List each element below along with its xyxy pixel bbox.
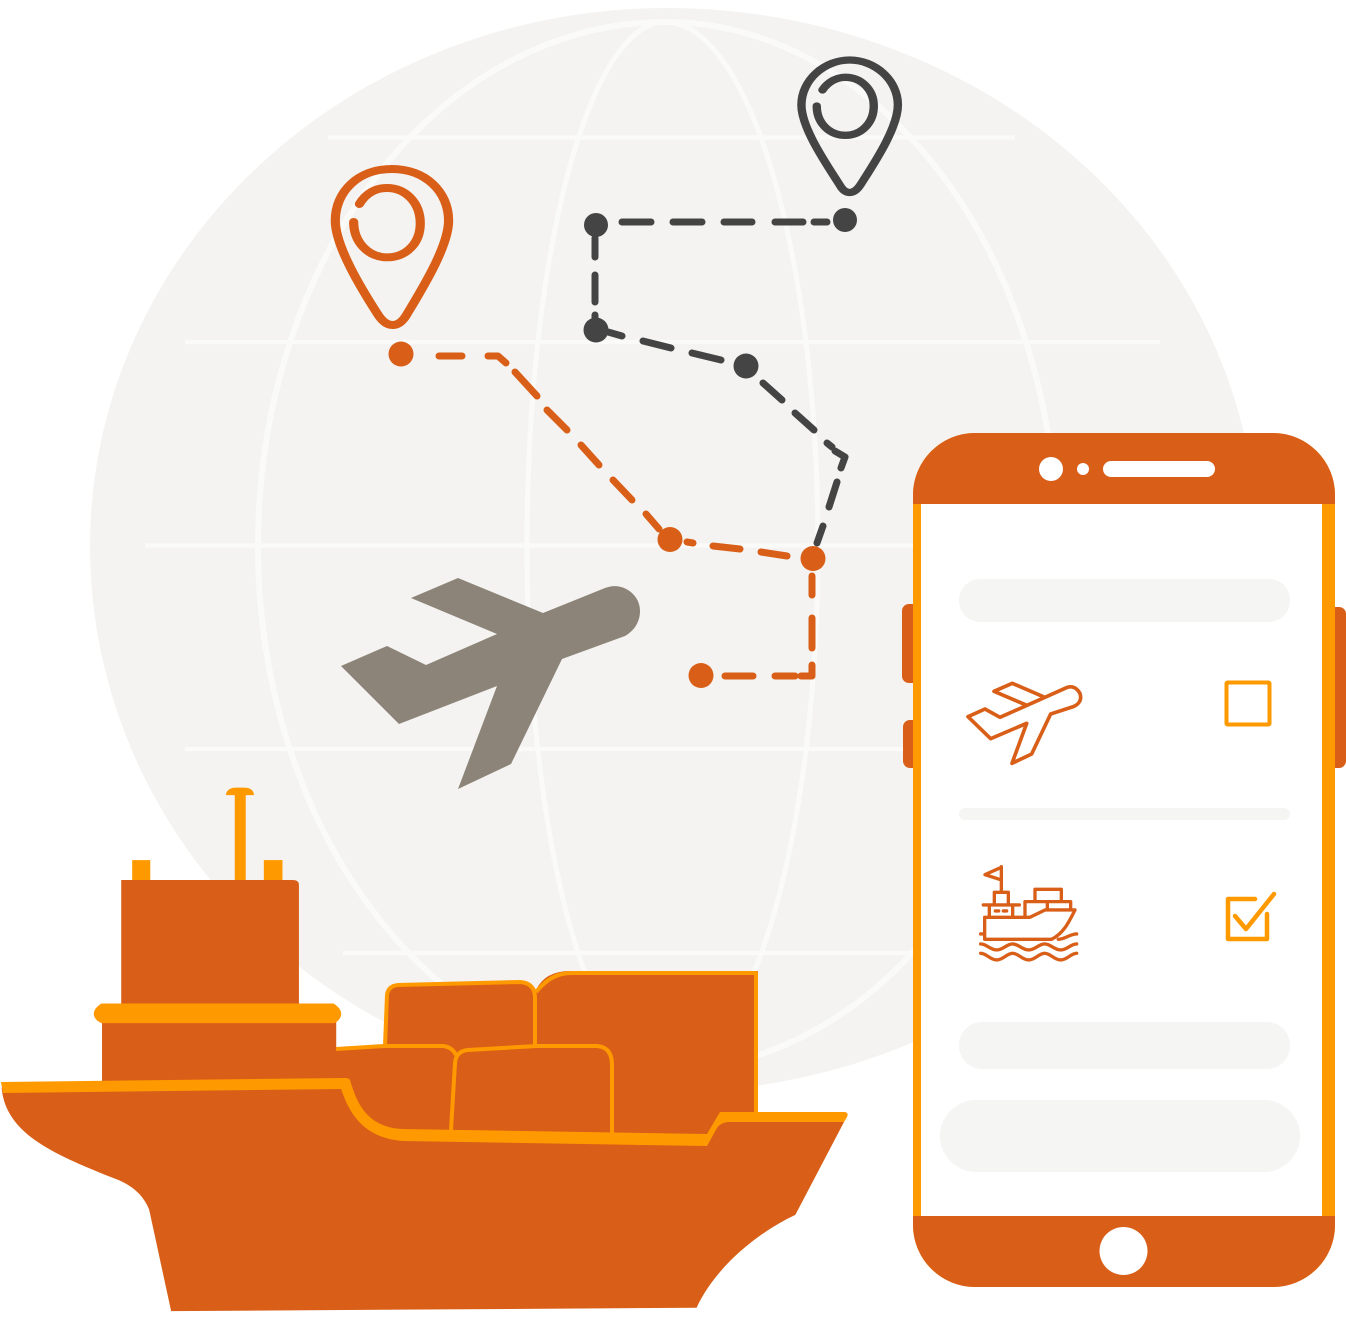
route: dark dashed path: [584, 208, 857, 543]
phone: side buttons: [902, 604, 1346, 768]
ship: mast and funnels: [132, 788, 282, 881]
ship: deck stripe: [1, 1078, 848, 1146]
phone: bottom bar with home button: [913, 1216, 1335, 1287]
icon: airplane outline: [968, 683, 1081, 763]
icon: checked box: [1228, 894, 1274, 939]
phone: body: [913, 433, 1335, 1287]
icon: ship outline: [981, 867, 1077, 960]
ship: bridge tower: [102, 880, 336, 1083]
icon: orange location pin: [335, 169, 449, 325]
phone: screen: [921, 500, 1322, 1220]
phone: top bar: [913, 433, 1335, 504]
ship: [1, 788, 848, 1311]
icon: airplane: [341, 578, 640, 789]
icon: dark location pin: [801, 60, 898, 192]
globe: [90, 8, 1257, 1092]
phone: placeholder bars: [940, 579, 1300, 1172]
route: orange dashed path: [388, 342, 826, 688]
phone: [902, 433, 1346, 1287]
ship: bridge deck band: [94, 1003, 341, 1023]
ship: hull: [2, 1083, 846, 1311]
ship: cargo containers: [336, 971, 758, 1140]
icon: unchecked box: [1226, 682, 1270, 724]
